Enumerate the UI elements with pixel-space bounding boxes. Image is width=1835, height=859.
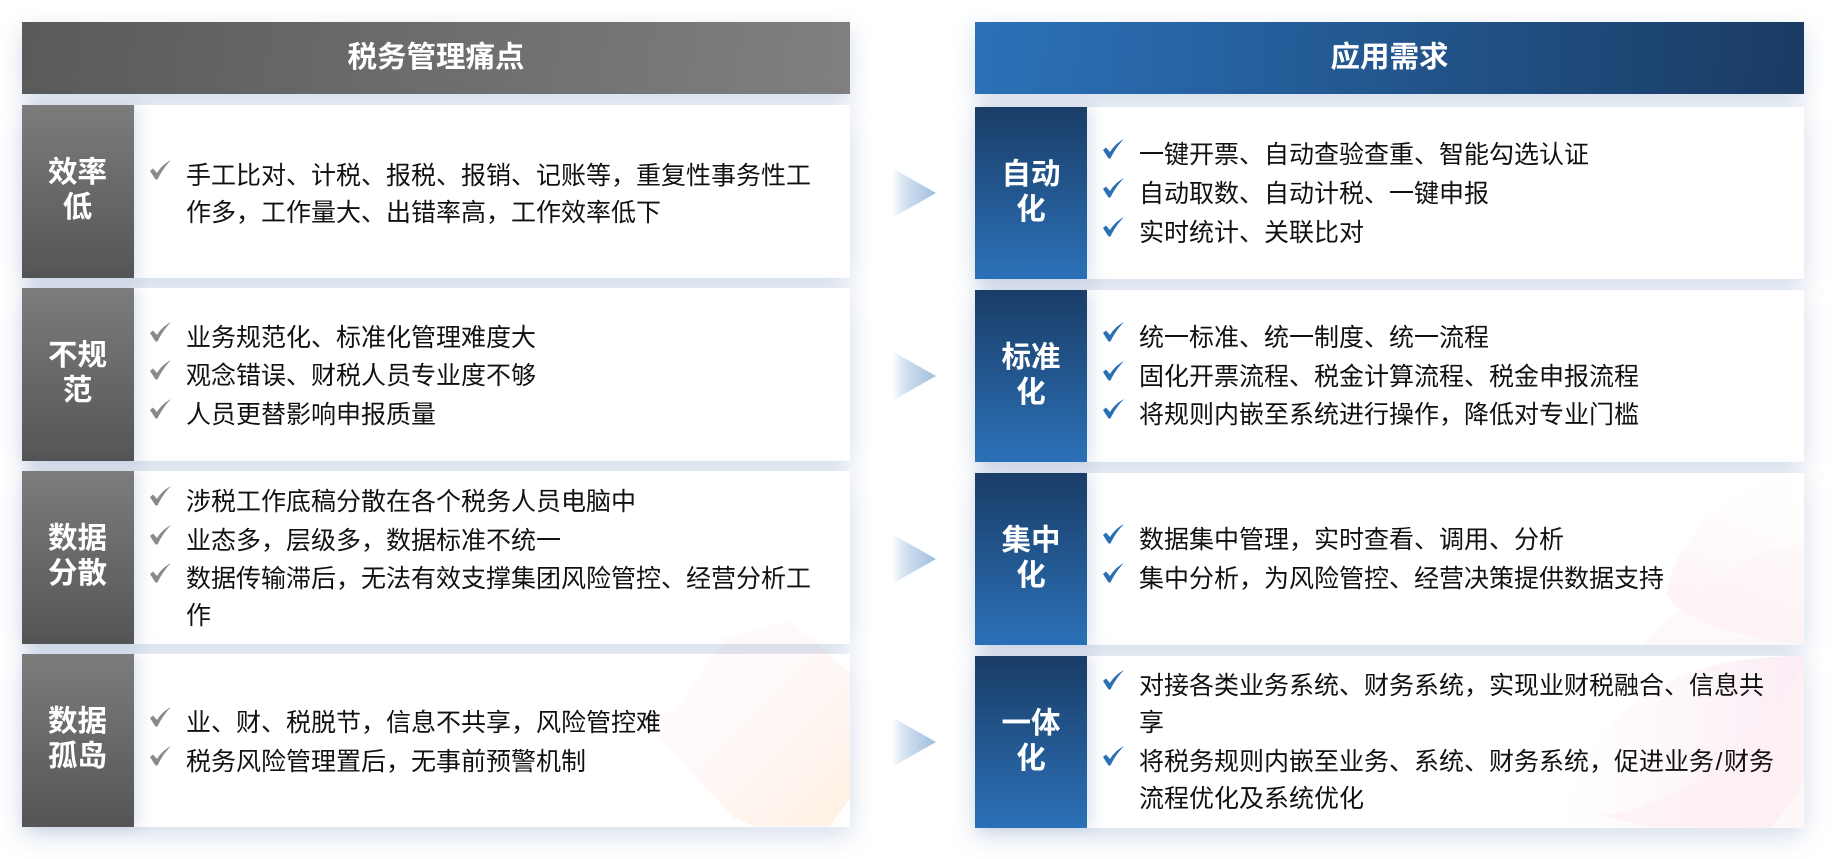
label: not standardized: 范 — [63, 374, 92, 407]
bullet: no early warning: 税务风险管理置后，无事前预警机制 — [186, 748, 586, 776]
label: data silos: 孤岛 — [48, 740, 107, 773]
bullet: embedded tax rules — [1103, 746, 1774, 813]
bullet: centralized analysis: 集中分析，为风险管控、经营决策提供数据支持 — [1139, 565, 1664, 593]
panel: automation — [975, 107, 1804, 279]
heading: tax management pain points — [22, 22, 850, 94]
label: automation: 自动 — [1001, 158, 1060, 190]
bullet: fixed processes: 固化开票流程、税金计算流程、税金申报流程 — [1139, 363, 1639, 391]
panel: data silos — [22, 654, 850, 827]
bullet: disconnected finance and tax: 业、财、税脱节，信息不共享，风险管控难 — [186, 709, 661, 737]
bullet: system integration: 享 — [1139, 709, 1164, 737]
arrow: row 2 — [894, 352, 936, 400]
bullet: repetitive work — [150, 160, 811, 227]
label: low efficiency: 效率 — [48, 156, 107, 189]
bullet: real-time statistics: 实时统计、关联比对 — [1139, 219, 1364, 247]
label: integration: 一体 — [1001, 706, 1060, 740]
bullet: embedded rules: 将规则内嵌至系统进行操作，降低对专业门槛 — [1139, 401, 1639, 429]
bullet: inconsistent standards: 业态多，层级多，数据标准不统一 — [186, 527, 561, 555]
label: data silos: 数据 — [48, 705, 107, 738]
label: integration: 化 — [1016, 742, 1046, 774]
panel: low efficiency — [22, 105, 850, 278]
label: centralization: 集中 — [1001, 524, 1060, 556]
label: automation: 化 — [1016, 192, 1046, 226]
bullet: embedded tax rules: 流程优化及系统优化 — [1139, 785, 1364, 813]
heading: application requirements: 应用需求 — [1330, 41, 1448, 74]
label: not standardized — [22, 288, 134, 461]
label: standardization: 化 — [1016, 376, 1046, 408]
panel: scattered data — [22, 471, 850, 644]
label: standardization: 标准 — [1001, 340, 1060, 374]
heading: tax management pain points: 税务管理痛点 — [347, 41, 524, 74]
bullet: system integration — [1103, 670, 1764, 737]
bullet: unified standards: 统一标准、统一制度、统一流程 — [1139, 324, 1489, 352]
label: centralization: 化 — [1016, 558, 1046, 592]
label: low efficiency — [22, 105, 134, 278]
bullet: scattered drafts: 涉税工作底稿分散在各个税务人员电脑中 — [186, 488, 636, 516]
bullet: transmission lag — [150, 563, 811, 630]
bullet: system integration: 对接各类业务系统、财务系统，实现业财税融合、信息共 — [1139, 672, 1764, 700]
bullet: repetitive work: 作多，工作量大、出错率高，工作效率低下 — [186, 199, 661, 227]
bullet: embedded tax rules: 将税务规则内嵌至业务、系统、财务系统，促进业务/财务 — [1139, 748, 1774, 776]
label: not standardized: 不规 — [48, 339, 107, 372]
label: standardization — [975, 290, 1087, 462]
bullet: staff turnover: 人员更替影响申报质量 — [186, 401, 436, 429]
bullet: one-click invoicing: 一键开票、自动查验查重、智能勾选认证 — [1139, 141, 1589, 169]
decorative petals — [697, 553, 1804, 828]
bullet: centralized data management: 数据集中管理，实时查看、调用、分析 — [1139, 526, 1564, 554]
bullet: repetitive work: 手工比对、计税、报税、报销、记账等，重复性事务性工 — [186, 162, 811, 190]
label: integration — [975, 656, 1087, 828]
bullet: automatic filing: 自动取数、自动计税、一键申报 — [1139, 180, 1489, 208]
bullet: staff expertise: 观念错误、财税人员专业度不够 — [186, 362, 536, 390]
panel: integration — [975, 656, 1804, 828]
panel: centralization — [975, 473, 1804, 645]
arrow: row 1 — [894, 170, 936, 216]
panel: standardization — [975, 290, 1804, 462]
label: scattered data: 数据 — [48, 522, 107, 555]
arrow: row 3 — [894, 536, 936, 582]
bullet: transmission lag: 数据传输滞后，无法有效支撑集团风险管控、经营分析工 — [186, 565, 811, 593]
label: centralization — [975, 473, 1087, 645]
label: scattered data — [22, 471, 134, 644]
label: scattered data: 分散 — [48, 557, 107, 590]
panel: not standardized — [22, 288, 850, 461]
arrow: row 4 — [894, 718, 936, 766]
label: data silos — [22, 654, 134, 827]
label: low efficiency: 低 — [63, 191, 92, 224]
bullet: transmission lag: 作 — [186, 602, 211, 630]
heading: application requirements — [975, 22, 1804, 94]
label: automation — [975, 107, 1087, 279]
bullet: standardization difficulty: 业务规范化、标准化管理难度大 — [186, 324, 536, 352]
